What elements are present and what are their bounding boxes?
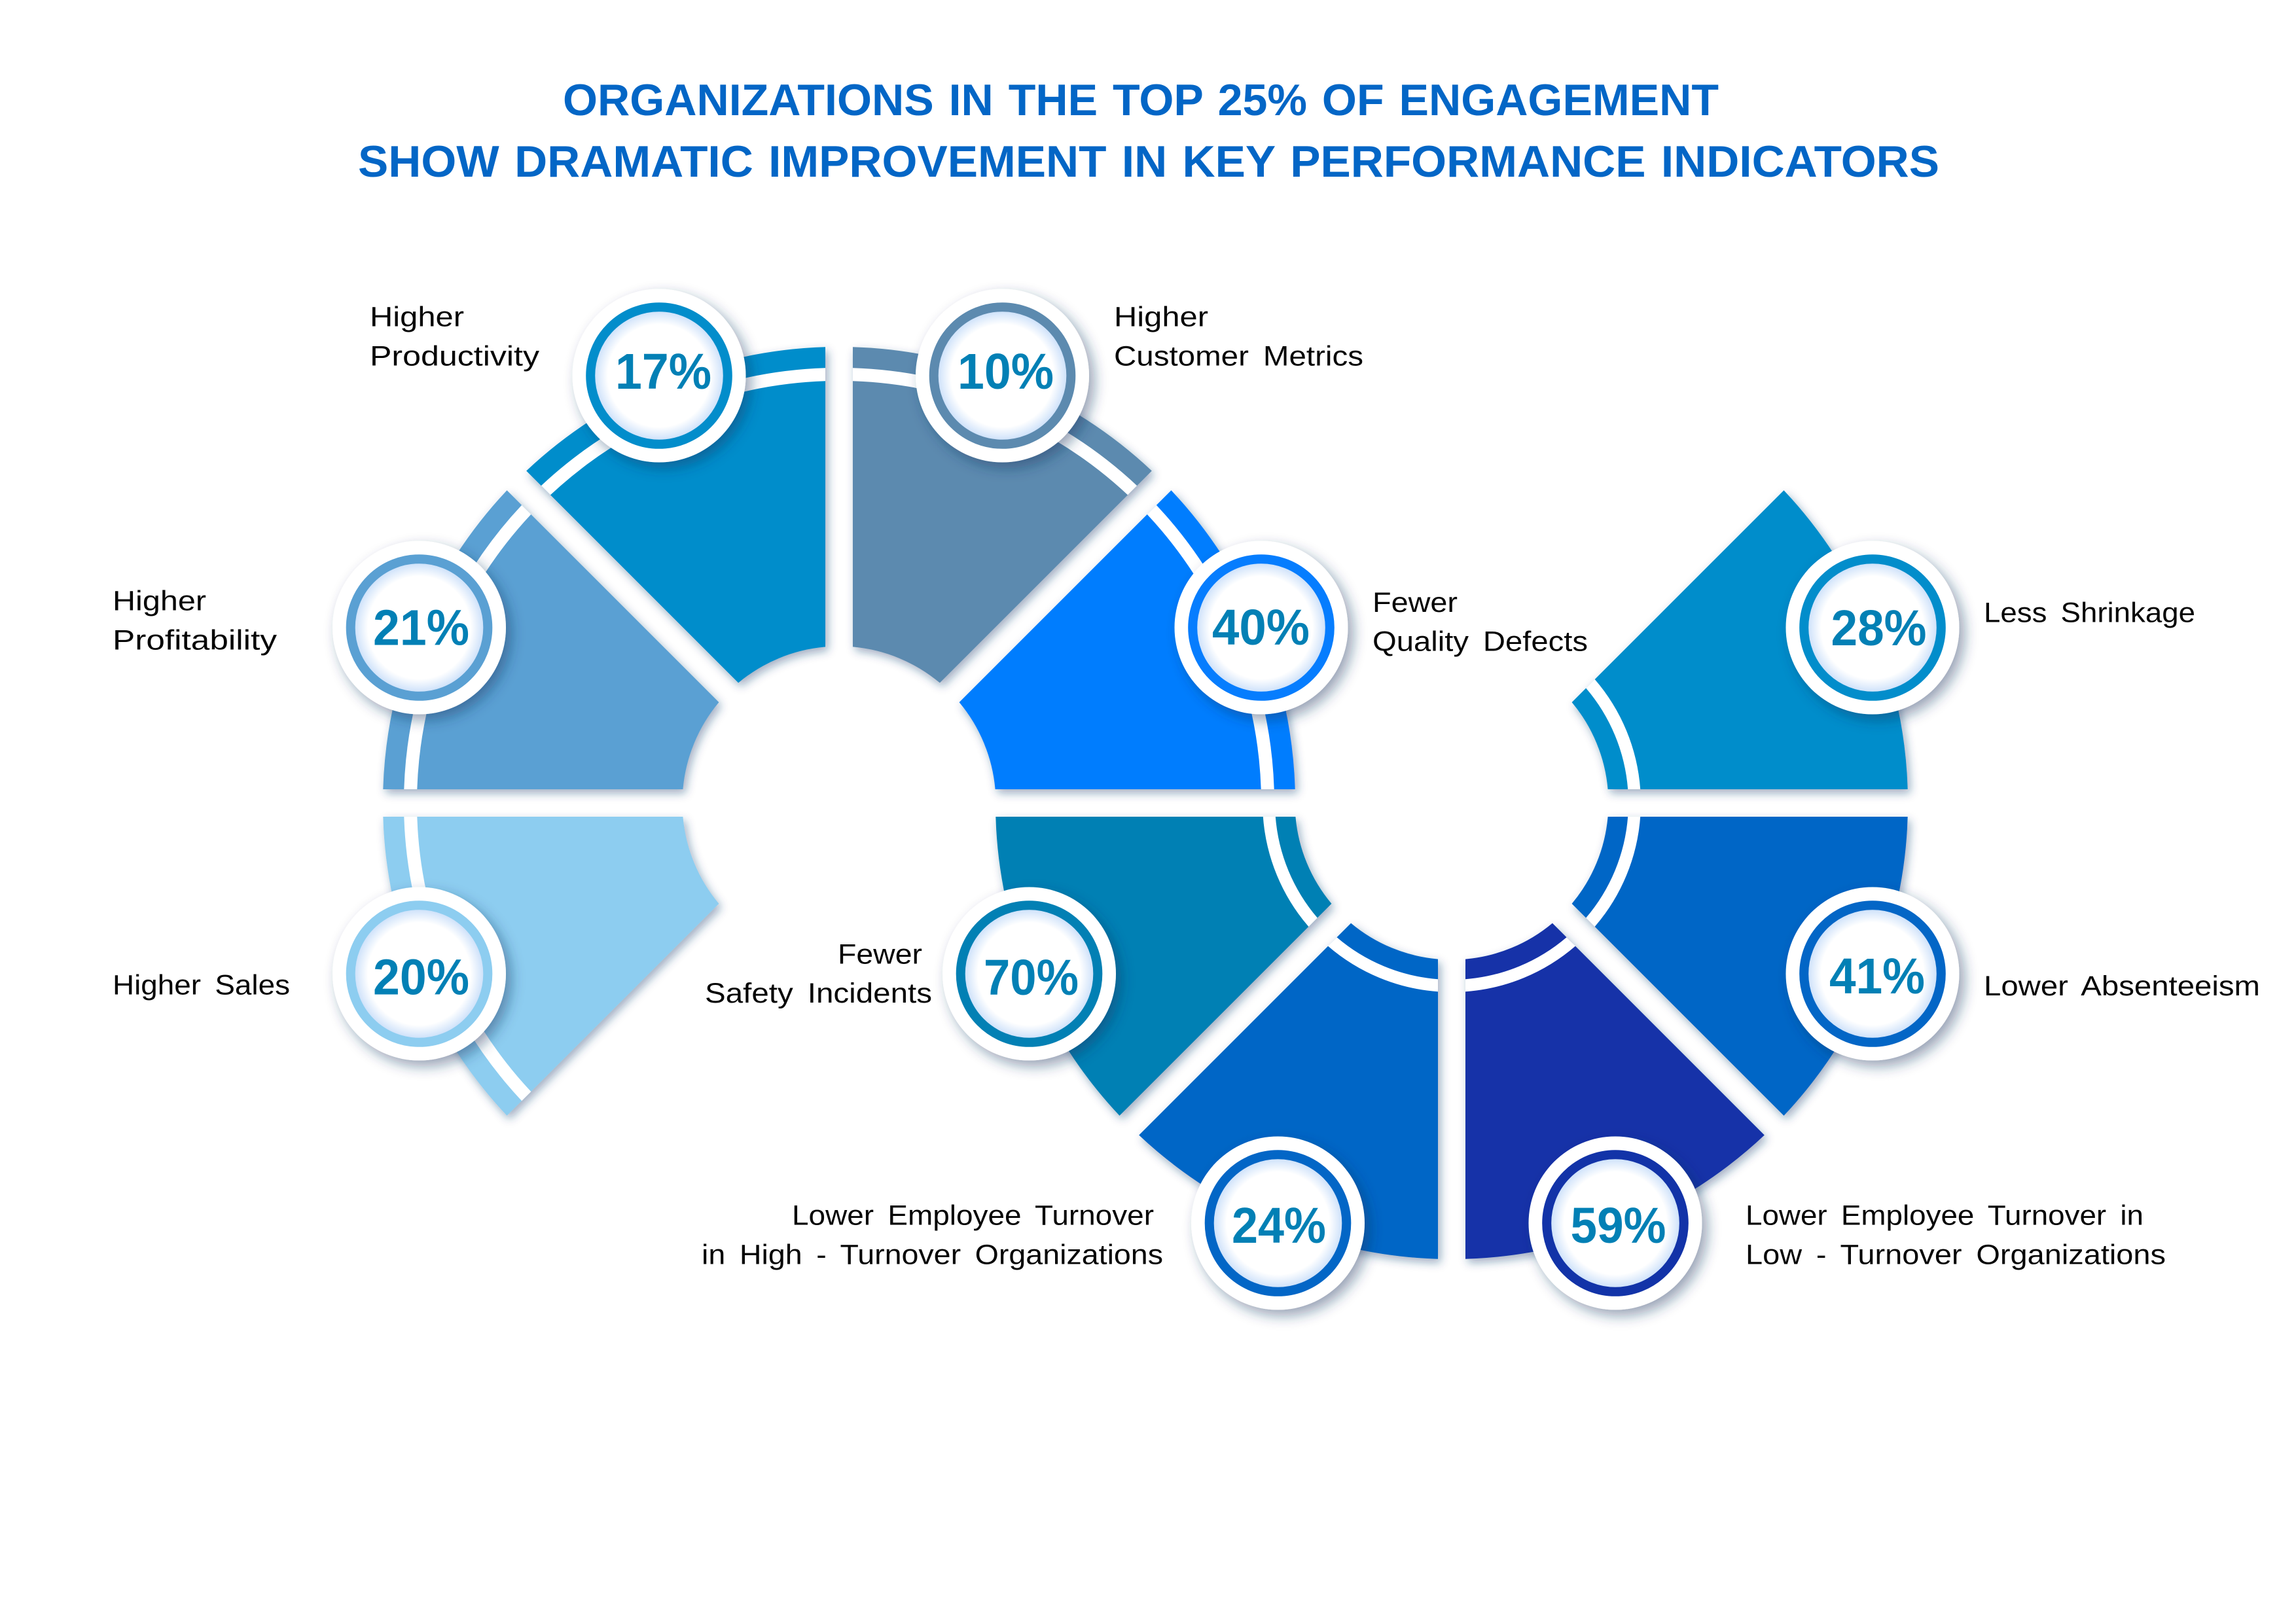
label: lower employee turnover in high-turnover organizations: in High - Turnover Organizations xyxy=(702,1240,1163,1271)
label: fewer quality defects: Quality Defects xyxy=(1372,626,1588,658)
label: fewer safety incidents xyxy=(705,938,932,1009)
label: lower employee turnover in high-turnover organizations xyxy=(702,1200,1163,1271)
label: lower employee turnover in low-turnover organizations xyxy=(1746,1200,2166,1271)
badge: 21% xyxy=(332,541,506,715)
chart: right ring segments xyxy=(996,490,1908,1259)
segment: lower absenteeism xyxy=(1572,817,1908,1116)
label: fewer safety incidents: Safety Incidents xyxy=(705,978,932,1009)
badge: 41% xyxy=(1785,887,1960,1060)
badge: 20% xyxy=(332,887,506,1060)
label: lower employee turnover in low-turnover organizations: Low - Turnover Organizations xyxy=(1746,1240,2166,1271)
segment: lower turnover in high-turnover organizations xyxy=(1139,923,1438,1259)
badge: 40%: 40% xyxy=(1212,599,1310,656)
badge: 24%: 24% xyxy=(1232,1198,1326,1254)
label: higher profitability: Higher xyxy=(113,586,206,617)
badge: 41%: 41% xyxy=(1829,948,1925,1005)
label: lower absenteeism: Lower Absenteeism xyxy=(1984,971,2260,1002)
badge: 10% xyxy=(916,289,1089,462)
title: ORGANIZATIONS IN THE TOP 25% OF ENGAGEMENT xyxy=(563,75,1719,125)
badge: 70% xyxy=(942,887,1116,1060)
segment: fewer safety incidents xyxy=(996,817,1331,1116)
chart: left ring segments xyxy=(383,347,1295,1116)
label: fewer safety incidents: Fewer xyxy=(838,938,922,970)
title: SHOW DRAMATIC IMPROVEMENT IN KEY PERFORMANCE INDICATORS xyxy=(358,137,1939,187)
label: higher profitability: Profitability xyxy=(113,625,278,656)
label: higher customer metrics: Customer Metrics xyxy=(1114,340,1363,372)
badge: 70%: 70% xyxy=(984,950,1079,1006)
label: lower employee turnover in low-turnover organizations: Lower Employee Turnover in xyxy=(1746,1200,2144,1232)
badge: 17% xyxy=(572,289,746,462)
label: higher profitability xyxy=(113,586,278,656)
badge: 24% xyxy=(1191,1136,1365,1310)
segment: higher productivity xyxy=(526,347,825,683)
badge: 10%: 10% xyxy=(958,344,1054,400)
badge: 17%: 17% xyxy=(615,344,711,400)
label: higher productivity: Productivity xyxy=(370,340,540,372)
label: higher productivity: Higher xyxy=(370,302,464,333)
segment: fewer quality defects xyxy=(960,490,1295,789)
segment: less shrinkage xyxy=(1572,490,1908,789)
badge: 20%: 20% xyxy=(373,949,469,1005)
label: fewer quality defects: Fewer xyxy=(1372,587,1458,618)
badge: 40% xyxy=(1174,541,1348,715)
label: less shrinkage: Less Shrinkage xyxy=(1984,597,2195,628)
label: fewer quality defects xyxy=(1372,587,1588,658)
label: lower employee turnover in high-turnover organizations: Lower Employee Turnover xyxy=(792,1200,1154,1232)
segment: higher sales xyxy=(383,817,719,1116)
label: higher customer metrics: Higher xyxy=(1114,302,1208,333)
label: higher productivity xyxy=(370,302,540,372)
badge: 59% xyxy=(1529,1136,1702,1310)
segment: higher profitability xyxy=(383,490,719,789)
badge: 28% xyxy=(1785,541,1960,715)
label: higher customer metrics xyxy=(1114,302,1363,372)
segment: lower turnover in low-turnover organizations xyxy=(1465,923,1765,1259)
title xyxy=(358,75,1939,187)
segment: higher customer metrics xyxy=(853,347,1152,683)
label: higher sales: Higher Sales xyxy=(113,969,290,1001)
badge: 28%: 28% xyxy=(1831,600,1927,656)
badge: 59%: 59% xyxy=(1571,1198,1666,1254)
badge: 21%: 21% xyxy=(373,599,469,656)
